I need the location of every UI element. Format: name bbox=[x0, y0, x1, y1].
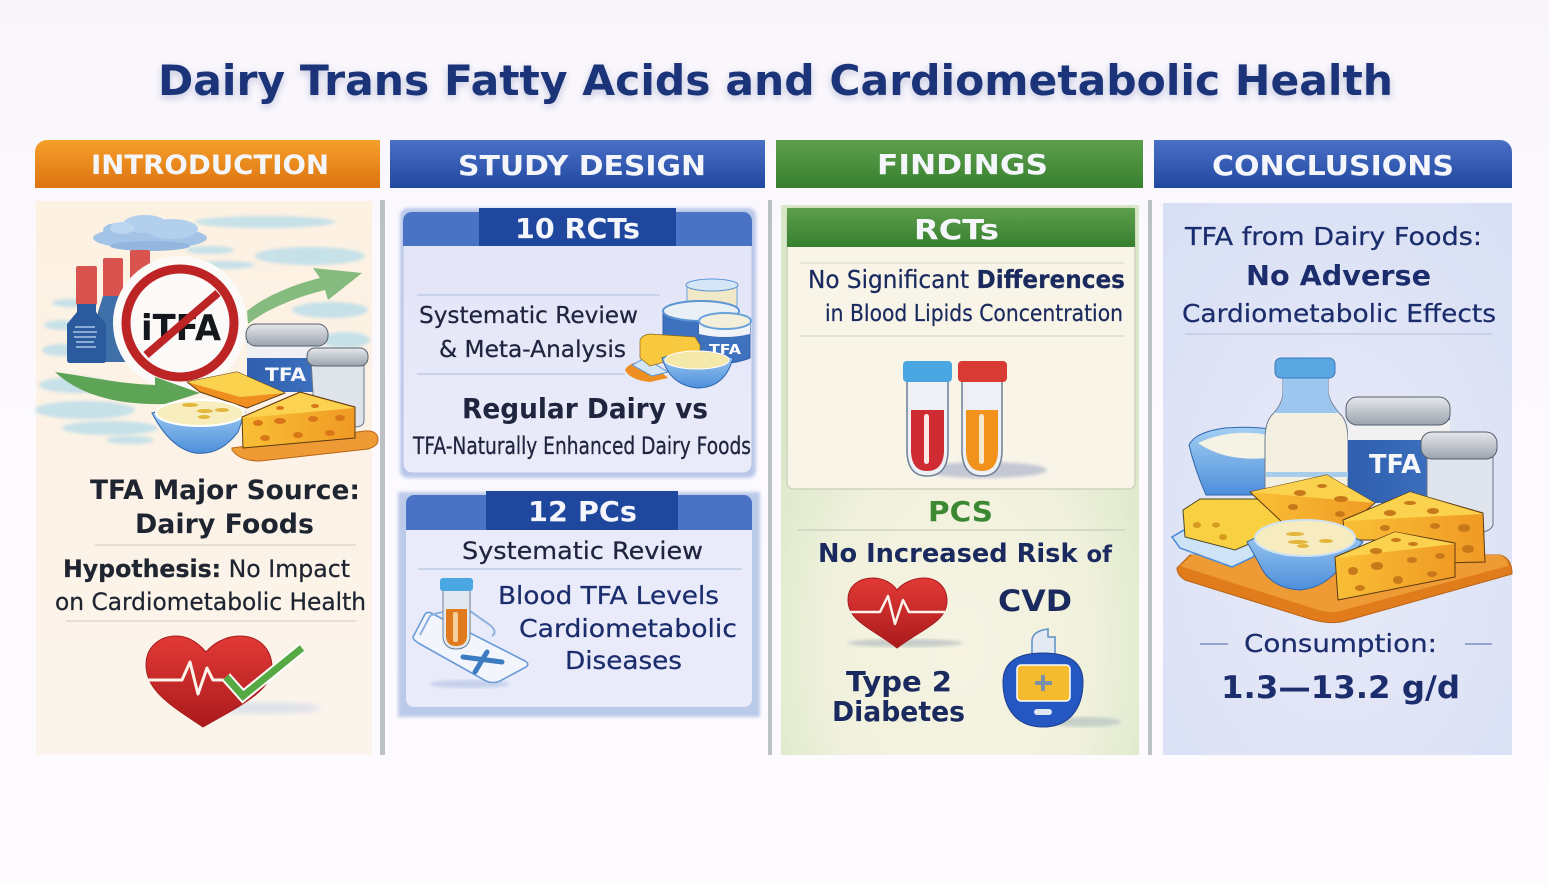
card: 12 PCs bbox=[398, 491, 760, 717]
TFA jar bbox=[246, 324, 328, 392]
small jar bbox=[1421, 432, 1497, 532]
icon: heart with check bbox=[146, 636, 322, 727]
panel: study design bbox=[390, 140, 765, 717]
milk bottle bbox=[1265, 358, 1348, 490]
study design header: STUDY DESIGN bbox=[458, 149, 706, 182]
findings header bbox=[776, 140, 1143, 188]
text: review type: Systematic Review bbox=[419, 303, 638, 329]
cheese wedge back bbox=[1250, 475, 1375, 530]
panel: introduction bbox=[35, 140, 380, 755]
icon: dairy group: TFA bbox=[709, 343, 741, 358]
prohibition sign: iTFA bbox=[141, 308, 221, 349]
text: hypothesis: Hypothesis: No Impact bbox=[63, 555, 350, 583]
text: hypothesis bbox=[55, 555, 366, 616]
introduction background bbox=[36, 201, 372, 755]
icon: test tubes bbox=[903, 361, 1047, 478]
text: conclusion statement: TFA from Dairy Foods: bbox=[1184, 222, 1482, 251]
RCTs header band: RCTs bbox=[914, 213, 999, 246]
text: consumption: Consumption: bbox=[1244, 629, 1437, 658]
text: no increased risk: No Increased Risk of bbox=[818, 539, 1113, 569]
conclusions header: CONCLUSIONS bbox=[1212, 149, 1454, 182]
heading: PCS: PCS bbox=[928, 495, 993, 528]
text: conclusion statement bbox=[1182, 222, 1496, 328]
panel: findings bbox=[776, 140, 1143, 755]
text: blood TFA levels and diseases: Cardiometabolic bbox=[519, 614, 737, 643]
findings header: FINDINGS bbox=[877, 148, 1048, 181]
text: review type: & Meta-Analysis bbox=[439, 337, 626, 363]
back cheese bbox=[187, 372, 285, 408]
bottles bbox=[67, 250, 150, 363]
RCTs header band bbox=[787, 208, 1135, 247]
text: TFA major source: TFA Major Source: bbox=[90, 475, 360, 506]
small jar bbox=[307, 348, 368, 427]
conclusions header bbox=[1154, 140, 1512, 188]
card: 10 RCTs bbox=[400, 208, 756, 478]
text: comparison: Regular Dairy vs bbox=[462, 392, 708, 425]
big TFA jar bbox=[1346, 397, 1450, 503]
cheese wedge front bbox=[1335, 532, 1455, 600]
cloud bbox=[93, 215, 207, 251]
text: TFA major source: Dairy Foods bbox=[135, 509, 314, 540]
big TFA jar: TFA bbox=[1369, 450, 1421, 480]
12 PCs header band bbox=[406, 491, 752, 530]
panel: conclusions bbox=[1154, 140, 1512, 755]
icon: glucose meter bbox=[1003, 629, 1121, 727]
front cheese bbox=[242, 392, 355, 448]
text: blood TFA levels and diseases bbox=[498, 581, 737, 675]
title: Dairy Trans Fatty Acids and Cardiometabolic Health bbox=[158, 56, 1393, 105]
lower green arrow bbox=[55, 372, 200, 404]
text: systematic review: Systematic Review bbox=[462, 537, 703, 565]
10 RCTs header band bbox=[403, 208, 752, 246]
left bowl bbox=[1189, 427, 1270, 495]
text: TFA major source bbox=[90, 475, 360, 540]
label: type 2 diabetes: Diabetes bbox=[832, 695, 965, 728]
illustration: iTFA replaced by dairy bbox=[35, 215, 378, 461]
front bowl bbox=[1247, 520, 1363, 590]
label: CVD: CVD bbox=[998, 584, 1072, 618]
text: no significant differences: in Blood Lipids Concentration bbox=[825, 301, 1123, 327]
text: blood TFA levels and diseases: Blood TFA Levels bbox=[498, 581, 719, 610]
text: comparison bbox=[412, 392, 751, 460]
text: hypothesis: on Cardiometabolic Health bbox=[55, 588, 366, 616]
findings background bbox=[781, 205, 1139, 755]
TFA jar: TFA bbox=[265, 364, 306, 386]
butter on dish bbox=[1172, 499, 1282, 567]
text: no significant differences: No Significant Differences bbox=[808, 265, 1125, 294]
icon: blood tube on clipboard bbox=[413, 578, 528, 688]
text: blood TFA levels and diseases: Diseases bbox=[565, 646, 682, 675]
introduction header bbox=[35, 140, 380, 188]
study design header bbox=[390, 140, 765, 188]
text: no significant differences bbox=[808, 265, 1125, 327]
wooden board bbox=[232, 431, 378, 461]
label: type 2 diabetes bbox=[832, 665, 965, 728]
cheese wedge right bbox=[1343, 492, 1485, 563]
card: RCTs result bbox=[787, 208, 1135, 489]
upper green arrow bbox=[247, 268, 362, 324]
text: conclusion statement: No Adverse bbox=[1246, 259, 1431, 292]
text: conclusion statement: Cardiometabolic Effects bbox=[1182, 299, 1496, 328]
column divider lines bbox=[380, 200, 1152, 755]
10 RCTs header band: 10 RCTs bbox=[515, 212, 640, 245]
text: comparison: TFA-Naturally Enhanced Dairy Foods bbox=[412, 432, 751, 460]
introduction header: INTRODUCTION bbox=[91, 150, 329, 181]
prohibition sign bbox=[113, 256, 247, 390]
conclusions background bbox=[1163, 203, 1512, 755]
icon: heart bbox=[847, 578, 963, 648]
bowl bbox=[152, 400, 245, 453]
text: review type bbox=[419, 303, 638, 363]
wooden board bbox=[1177, 555, 1512, 623]
label: type 2 diabetes: Type 2 bbox=[846, 665, 952, 698]
12 PCs header band: 12 PCs bbox=[528, 495, 637, 528]
icon: dairy group bbox=[625, 279, 751, 388]
watercolor wash bbox=[35, 216, 370, 444]
illustration: dairy foods bbox=[1172, 358, 1512, 623]
text: consumption range: 1.3—13.2 g/d bbox=[1221, 670, 1460, 706]
